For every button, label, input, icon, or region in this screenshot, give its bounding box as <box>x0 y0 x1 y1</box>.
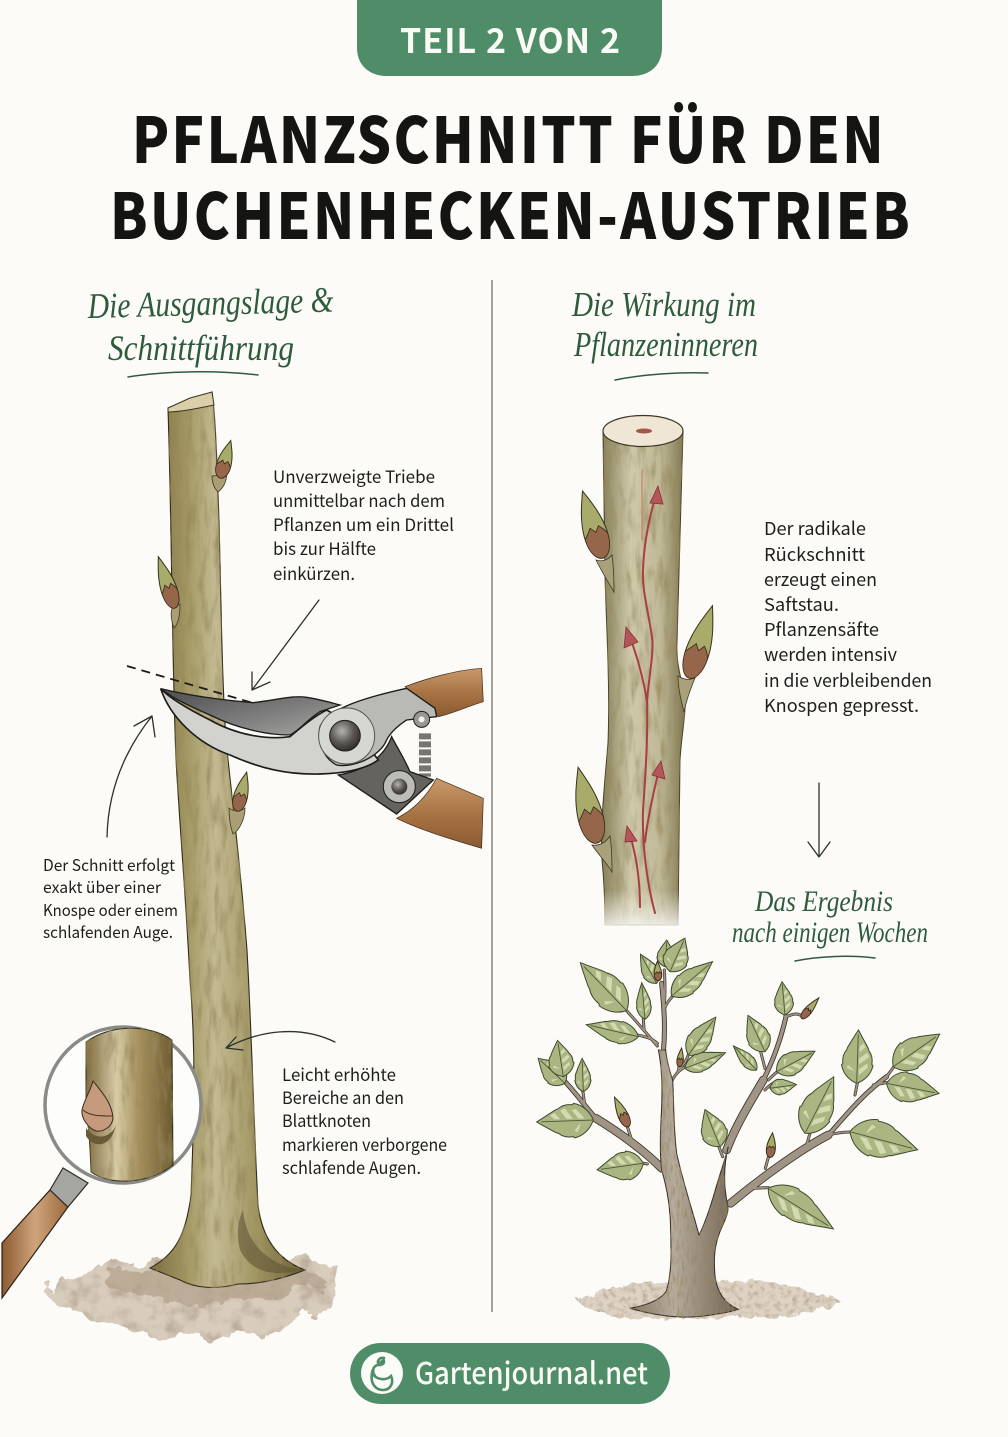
arrow: to trunk node <box>226 1032 335 1050</box>
text: Leicht erhöhte Bereiche: markieren verborgene <box>282 1131 447 1156</box>
fade at bottom of shoot <box>595 890 690 935</box>
lower silver blade <box>161 689 378 774</box>
cut guide dashed line <box>127 666 253 703</box>
text: Der Schnitt erfolgt <box>43 852 178 943</box>
center divider <box>491 280 493 1312</box>
text: Der Schnitt erfolgt: schlafenden Auge. <box>43 919 173 943</box>
heading: Die Ausgangslage und Schnittführung: Die Ausgangslage & <box>86 280 334 326</box>
badge: Teil 2 von 2 <box>357 0 662 76</box>
arrow: down to result <box>808 783 830 857</box>
text: Unverzweigte Triebe <box>273 463 454 585</box>
heading: Die Ausgangslage und Schnittführung: Schnittführung <box>108 328 294 368</box>
heading: Die Wirkung im Pflanzeninneren <box>571 285 758 380</box>
young beech with new shoots <box>530 933 949 1318</box>
text: Der radikale Rückschnitt: Saftstau. <box>764 591 839 617</box>
young tree buds <box>610 961 822 1158</box>
pivot bolt <box>330 720 360 751</box>
heading: Die Ausgangslage und Schnittführung <box>86 280 334 377</box>
text: Der Schnitt erfolgt: Knospe oder einem <box>43 897 178 921</box>
pivot plate <box>319 708 375 764</box>
badge: Teil 2 von 2: TEIL 2 VON 2 <box>400 14 620 63</box>
trunk <box>630 1050 738 1317</box>
cut surface <box>603 416 683 446</box>
trunk: pruned beech shoot <box>150 392 305 1287</box>
upper arm plate <box>319 688 437 766</box>
text: Leicht erhöhte Bereiche: schlafende Augen. <box>282 1154 421 1179</box>
side stubs <box>592 555 695 872</box>
ferrule <box>50 1168 88 1207</box>
text: Leicht erhöhte Bereiche <box>282 1061 447 1179</box>
footer badge <box>350 1343 670 1404</box>
title <box>110 90 910 257</box>
magnified trunk <box>86 1028 173 1181</box>
heading: Das Ergebnis nach einigen Wochen <box>732 885 928 961</box>
arrow: to blade from lower note <box>107 716 155 837</box>
magnifier handle <box>2 1190 68 1298</box>
heading: Die Wirkung im Pflanzeninneren: Pflanzeninneren <box>573 325 758 364</box>
text: Der radikale Rückschnitt: Rückschnitt <box>764 541 865 567</box>
spring <box>407 733 443 777</box>
text: Der Schnitt erfolgt: exakt über einer <box>43 874 162 898</box>
arrow: to cut from text <box>252 600 319 690</box>
soil left <box>48 1257 340 1335</box>
heading: Die Wirkung im Pflanzeninneren: Die Wirkung im <box>571 285 756 324</box>
text: Leicht erhöhte Bereiche: Blattknoten <box>282 1107 371 1132</box>
text: Leicht erhöhte Bereiche: Leicht erhöhte <box>282 1061 396 1086</box>
magnified bud <box>82 1081 118 1144</box>
stubs under buds <box>171 468 245 834</box>
soil right <box>577 1281 840 1318</box>
upper dark blade <box>161 689 340 735</box>
text: Der radikale Rückschnitt: Pflanzensäfte <box>764 616 879 642</box>
logo icon <box>361 1352 403 1394</box>
secateurs <box>161 668 483 848</box>
text: Unverzweigte Triebe: Pflanzen um ein Drittel <box>273 511 454 536</box>
buds <box>566 488 724 846</box>
text: Unverzweigte Triebe: unmittelbar nach dem <box>273 487 445 512</box>
leaves <box>530 933 949 1242</box>
cut shoot with sap arrows <box>566 416 724 935</box>
lower wooden handle <box>397 778 483 848</box>
text: Der radikale Rückschnitt: Der radikale <box>764 515 866 541</box>
text: Der radikale Rückschnitt <box>764 515 932 718</box>
footer badge: Gartenjournal.net <box>415 1349 648 1393</box>
text: Der radikale Rückschnitt: in die verbleibenden <box>764 667 932 693</box>
text: Unverzweigte Triebe: einkürzen. <box>273 560 355 585</box>
title: PFLANZSCHNITT FÜR DEN <box>132 90 884 181</box>
heading: Das Ergebnis nach einigen Wochen: Das Ergebnis <box>754 885 893 918</box>
pith <box>636 428 652 434</box>
text: Der radikale Rückschnitt: erzeugt einen <box>764 566 877 592</box>
title: BUCHENHECKEN-AUSTRIEB <box>110 166 910 257</box>
text: Der radikale Rückschnitt: werden intensiv <box>764 641 898 667</box>
text: Leicht erhöhte Bereiche: Bereiche an den <box>282 1084 404 1109</box>
buds on the trunk <box>151 439 253 813</box>
red sap arrows <box>629 470 659 913</box>
magnifier <box>2 1027 201 1298</box>
branches <box>563 970 894 1203</box>
text: Der radikale Rückschnitt: Knospen gepresst. <box>764 692 919 718</box>
upper wooden handle <box>405 668 483 717</box>
lens <box>45 1027 201 1183</box>
lower arm <box>338 737 433 814</box>
text: Unverzweigte Triebe: bis zur Hälfte <box>273 535 376 560</box>
small rivet <box>414 711 430 727</box>
text: Unverzweigte Triebe: Unverzweigte Triebe <box>273 463 435 488</box>
text: Der Schnitt erfolgt: Der Schnitt erfolgt <box>43 852 175 876</box>
heading: Das Ergebnis nach einigen Wochen: nach einigen Wochen <box>732 916 928 949</box>
lower rivet <box>383 771 415 803</box>
